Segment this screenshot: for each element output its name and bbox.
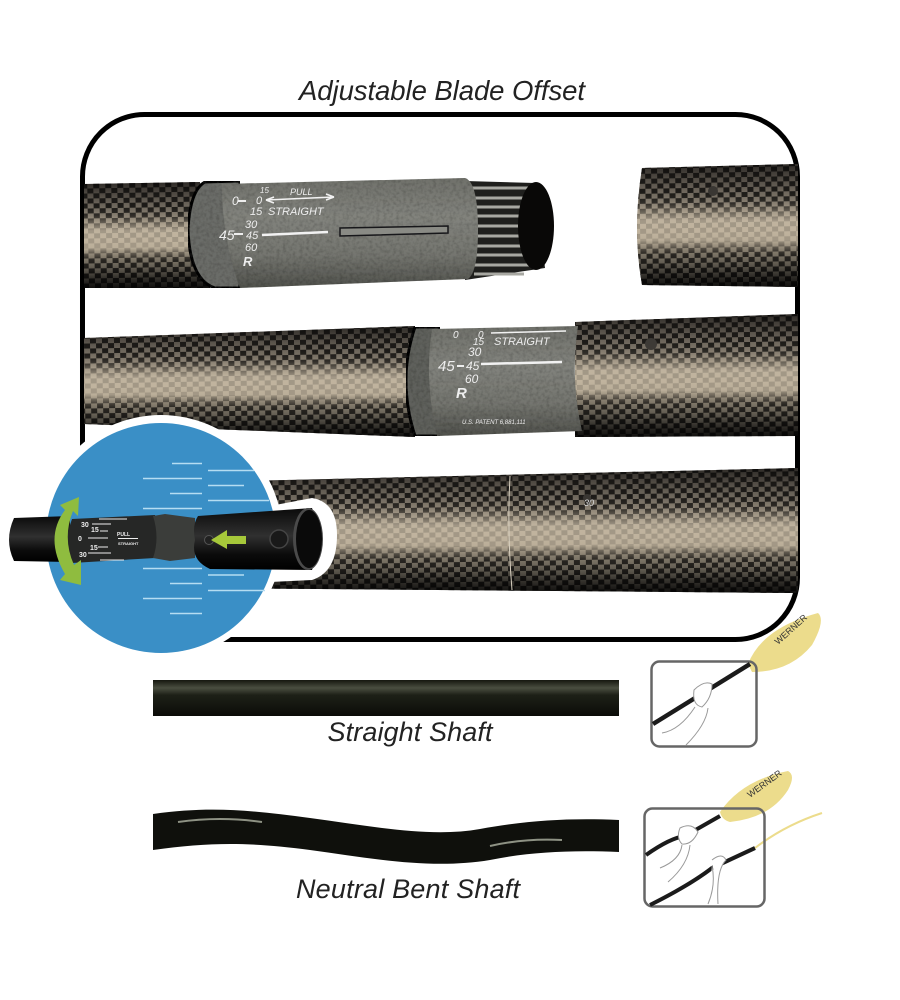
shaft 3: assembled tube bbox=[200, 468, 798, 593]
upper shaft bbox=[646, 816, 720, 855]
arrow: insert direction bbox=[211, 530, 246, 549]
carbon tube right bbox=[575, 314, 798, 437]
splined coupling bbox=[153, 514, 195, 561]
scale markings: 15 bbox=[91, 527, 99, 534]
yellow edge-on blade bbox=[755, 813, 822, 848]
sleeve markings: 60 bbox=[245, 242, 258, 254]
sleeve markings: U.S. PATENT 6,881,111 bbox=[462, 420, 526, 426]
shaft 2: connected tube bbox=[84, 314, 798, 437]
label: straight shaft: Straight Shaft bbox=[328, 717, 494, 747]
panel: rounded frame bbox=[82, 114, 798, 640]
grey sleeve bbox=[429, 326, 582, 436]
sleeve markings: 0 bbox=[256, 195, 263, 207]
title: Adjustable Blade Offset bbox=[297, 75, 586, 106]
hands bbox=[660, 826, 726, 904]
inset: blue circle with adjuster illustration bbox=[9, 415, 337, 659]
brand on blade: WERNER bbox=[745, 768, 784, 800]
inset tube halo bbox=[270, 498, 337, 582]
scale markings: 30 bbox=[79, 552, 87, 559]
sleeve markings: 45 bbox=[246, 230, 259, 242]
water lines bbox=[143, 464, 269, 614]
sleeve markings: R bbox=[456, 385, 467, 402]
inset white halo bbox=[39, 415, 283, 659]
sleeve markings: 15 bbox=[250, 206, 263, 218]
scale markings: 0 bbox=[78, 536, 82, 543]
sleeve markings bbox=[438, 330, 566, 426]
dark scale sleeve bbox=[68, 515, 159, 563]
scale markings bbox=[78, 519, 139, 560]
sleeve markings: PULL bbox=[290, 187, 313, 197]
grip box bbox=[644, 808, 764, 906]
grip box bbox=[652, 662, 756, 746]
neutral bent shaft bbox=[153, 810, 619, 864]
shaft 3: assembled tube: 30 bbox=[584, 498, 594, 508]
sleeve markings: 45 bbox=[438, 358, 455, 375]
scale markings: PULL bbox=[117, 532, 130, 538]
sleeve markings: 15 bbox=[473, 337, 485, 348]
sleeve markings: 45 bbox=[219, 227, 235, 243]
shaft line bbox=[653, 664, 750, 724]
arrow: rotate both ways bbox=[54, 497, 81, 585]
shaft 1: right detached tube bbox=[637, 164, 798, 287]
sleeve markings: 0 bbox=[453, 330, 459, 341]
collar bbox=[188, 181, 240, 288]
sleeve markings: 0 bbox=[232, 194, 239, 208]
sleeve markings: 45 bbox=[466, 359, 480, 373]
sleeve markings: STRAIGHT bbox=[268, 206, 325, 218]
grey sleeve bbox=[222, 178, 478, 288]
icon: bent shaft paddle grip bbox=[644, 768, 822, 906]
yellow blade bbox=[720, 771, 792, 822]
collar bbox=[406, 327, 440, 436]
sleeve markings: R bbox=[243, 254, 253, 269]
sleeve markings: 15 bbox=[260, 186, 269, 195]
lower shaft bbox=[650, 848, 755, 905]
carbon tube left bbox=[84, 182, 210, 288]
shaft 1: left tube with scale sleeve bbox=[84, 178, 554, 288]
carbon tube left bbox=[84, 326, 415, 437]
scale markings: 15 bbox=[90, 545, 98, 552]
black rear tube bbox=[9, 516, 70, 562]
blue disc bbox=[46, 423, 276, 653]
sleeve markings: 0 bbox=[478, 330, 484, 341]
sleeve markings: 30 bbox=[245, 219, 258, 231]
sleeve markings: STRAIGHT bbox=[494, 336, 551, 348]
icon: straight shaft paddle grip bbox=[652, 612, 821, 746]
brand on blade: WERNER bbox=[773, 612, 809, 646]
scale markings: 30 bbox=[81, 522, 89, 529]
sleeve markings bbox=[219, 186, 334, 269]
straight shaft bar bbox=[153, 680, 619, 716]
splined end bbox=[463, 181, 554, 280]
scale markings: STRAIGHT bbox=[118, 541, 139, 546]
label: neutral bent shaft: Neutral Bent Shaft bbox=[296, 874, 521, 904]
black front tube bbox=[194, 508, 318, 570]
sleeve slot bbox=[340, 226, 448, 236]
yellow blade bbox=[748, 613, 821, 672]
sleeve markings: 30 bbox=[468, 345, 482, 359]
hand bbox=[662, 683, 712, 745]
sleeve markings: 60 bbox=[465, 372, 479, 386]
